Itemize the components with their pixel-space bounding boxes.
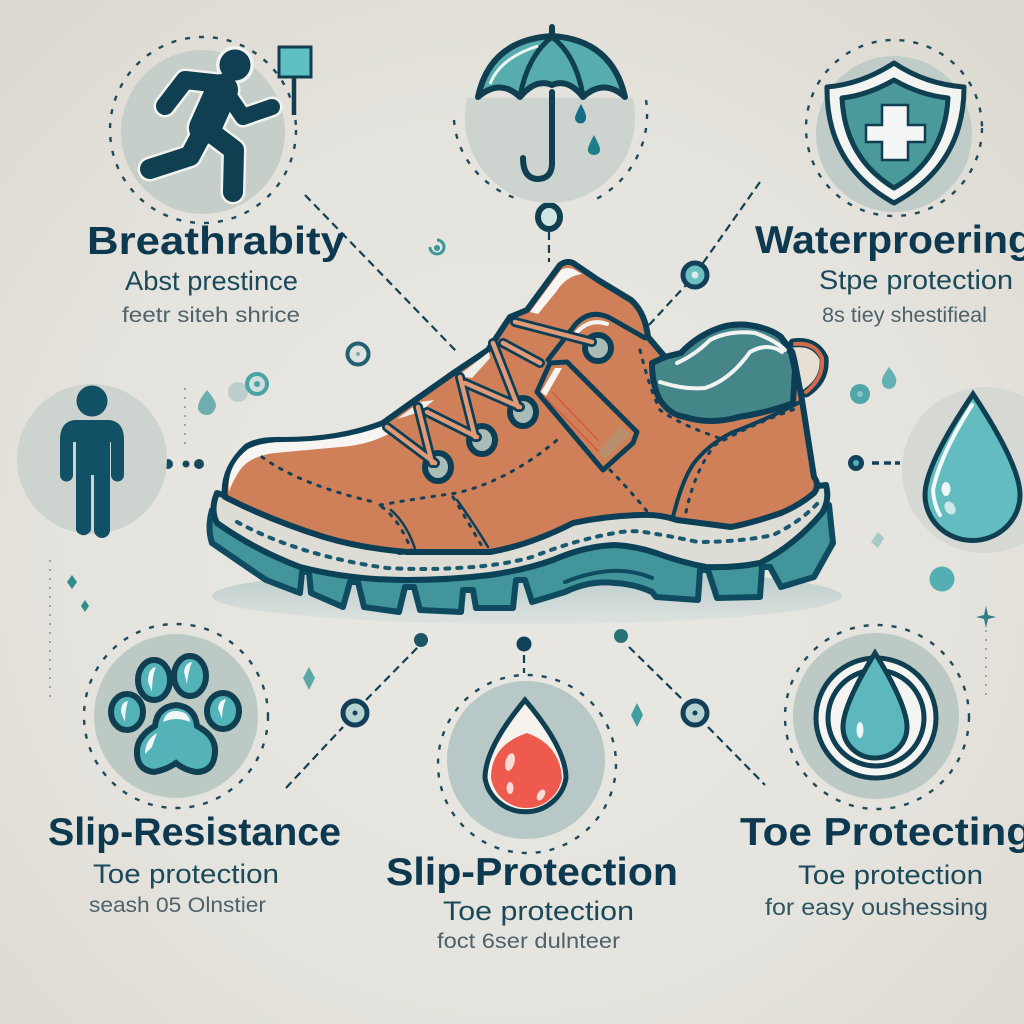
shoe welt xyxy=(214,485,827,580)
label: Slip-Resistance: seash 05 Olnstier xyxy=(89,894,266,917)
label: Slip-Resistance xyxy=(48,811,341,917)
panel: paw icon circle xyxy=(84,624,268,808)
label: Waterproering xyxy=(755,219,1024,327)
label: Slip-Protection: Slip-Protection xyxy=(386,851,678,894)
icon: shield with plus xyxy=(827,63,964,203)
label: Toe Protecting xyxy=(740,811,1024,920)
icon: paw print xyxy=(111,656,239,772)
eyelet arc xyxy=(548,314,645,360)
label: Breathrabity: feetr siteh shrice xyxy=(122,304,300,327)
illustration: hiking shoe xyxy=(210,262,833,612)
panel: runner icon circle xyxy=(110,37,311,223)
node: ring marker toe protection xyxy=(683,701,707,725)
label: Slip-Protection xyxy=(386,851,678,953)
shoe upper leather xyxy=(225,262,817,552)
node: ring marker small teal xyxy=(247,374,267,394)
panel: person icon circle xyxy=(17,384,167,538)
collar lining xyxy=(652,325,795,421)
laces xyxy=(387,322,592,463)
connector lines and small decorative nodes xyxy=(50,182,996,788)
icon: ringed drop xyxy=(816,653,936,778)
eyelets xyxy=(425,335,611,481)
label: Breathrabity: Abst prestince xyxy=(125,266,298,296)
welt stitching xyxy=(237,503,818,569)
label: Breathrabity xyxy=(87,220,345,327)
panel: water drop circle xyxy=(902,387,1024,553)
label: Waterproering: Stpe protection xyxy=(819,265,1013,295)
label: Toe Protecting: Toe Protecting xyxy=(740,811,1024,854)
panel: red drop circle xyxy=(438,675,616,853)
upper stitching xyxy=(262,350,798,552)
heel counter xyxy=(673,402,800,517)
label: Toe Protecting: Toe protection xyxy=(798,860,983,890)
label: Slip-Protection: Toe protection xyxy=(443,896,634,926)
label: Slip-Protection: foct 6ser dulnteer xyxy=(437,930,620,953)
label: Waterproering: Waterproering xyxy=(755,219,1024,262)
label: Waterproering: 8s tiey shestifieal xyxy=(822,304,987,327)
node: ring marker on umbrella line xyxy=(538,205,560,229)
label: Breathrabity: Breathrabity xyxy=(87,220,345,263)
shoe ground shadow xyxy=(212,568,842,624)
velcro strap xyxy=(537,362,637,470)
icon: umbrella xyxy=(478,27,625,179)
label: Toe Protecting: for easy oushessing xyxy=(765,894,988,920)
node: ring marker slip-resistance xyxy=(343,701,367,725)
node: ring marker breathability xyxy=(348,344,368,364)
tongue highlight xyxy=(530,268,582,314)
icon: small flag marker xyxy=(279,47,311,115)
panel: shield icon circle xyxy=(806,40,982,216)
label: Slip-Resistance: Toe protection xyxy=(93,859,279,889)
icon: red drop xyxy=(485,700,566,812)
heel loop xyxy=(793,343,824,393)
panel: ringed drop circle xyxy=(785,625,969,809)
label: Slip-Resistance: Slip-Resistance xyxy=(48,811,341,854)
panel: umbrella icon circle xyxy=(454,27,647,203)
toe highlight xyxy=(229,426,392,492)
icon: runner xyxy=(150,46,272,192)
node: ring marker on waterproofing line xyxy=(683,263,707,287)
arch inner line xyxy=(565,571,652,582)
icon: water drop xyxy=(925,394,1020,540)
collar highlights xyxy=(677,332,785,363)
icon: person xyxy=(60,386,124,538)
shoe outsole with lugs xyxy=(210,505,833,612)
